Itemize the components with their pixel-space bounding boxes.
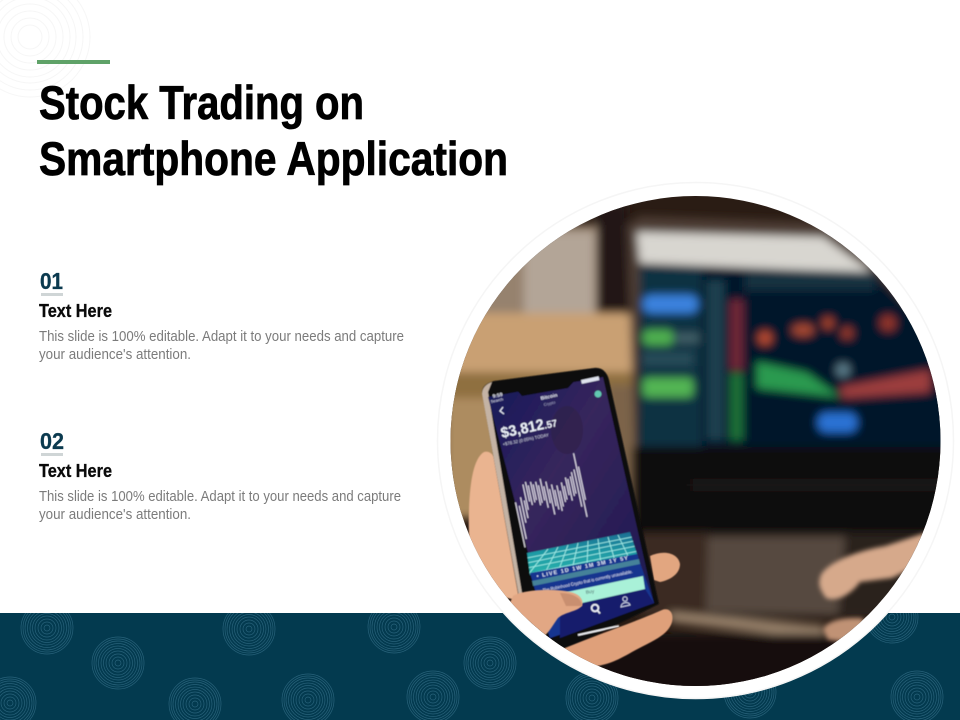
status and header text (490, 392, 558, 407)
finger to the right of phone (650, 553, 680, 582)
dark navigation area (560, 589, 654, 638)
body text 02 (39, 488, 401, 523)
blurred background: room and laptop (445, 205, 960, 694)
title: Smartphone Application (39, 132, 508, 185)
buy button (566, 575, 646, 604)
thumb over phone (510, 589, 584, 636)
phone (482, 368, 659, 660)
body text 01 (39, 328, 404, 363)
phone screen (488, 377, 654, 638)
circular photo: smartphone with trading app in front of laptop (445, 190, 960, 694)
notch (518, 381, 574, 396)
item 02 (39, 428, 401, 523)
title (39, 76, 508, 185)
lower fingers (560, 609, 673, 666)
unavailable notice: The Robinhood Crypto that is currently unavailable. (542, 569, 633, 593)
phone: • LIVE 1D 1W 1M 3M 1Y 5Y (536, 555, 630, 580)
body text 01: This slide is 100% editable. Adapt it to your needs and capture (39, 328, 404, 345)
lower blue panel (530, 554, 654, 638)
status and header text: Search (490, 396, 504, 404)
white photo ring (438, 182, 954, 698)
phone: +$78.32 (0.05%) TODAY (502, 432, 549, 447)
status and header text: Crypto (543, 399, 556, 407)
buy label: Buy (585, 588, 595, 596)
price text: $3,812.57 (499, 413, 559, 442)
body text 02: your audience's attention. (39, 506, 191, 523)
heading 02: Text Here (39, 461, 112, 481)
title: Stock Trading on (39, 76, 364, 129)
body text 02: This slide is 100% editable. Adapt it to your needs and capture (39, 488, 401, 505)
footer band with ring pattern (0, 613, 960, 720)
body text 01: your audience's attention. (39, 346, 191, 363)
search icon (592, 605, 600, 614)
status and header text: Bitcoin (540, 393, 558, 402)
time range row (532, 559, 640, 586)
left hand behind phone (468, 451, 519, 600)
perspective grid (526, 531, 638, 576)
number 01: 01 (40, 268, 63, 294)
blurred hand on laptop (819, 533, 935, 642)
home indicator (578, 626, 619, 635)
heading 01: Text Here (39, 301, 112, 321)
status and header text: 9:59 (492, 392, 503, 400)
background pattern: top-left concentric rings (0, 0, 90, 97)
phone body (482, 368, 659, 660)
number 02: 02 (40, 428, 64, 454)
item 01 (39, 268, 404, 363)
profile icon (621, 597, 630, 607)
price chart (514, 452, 588, 548)
title accent line (37, 60, 110, 64)
